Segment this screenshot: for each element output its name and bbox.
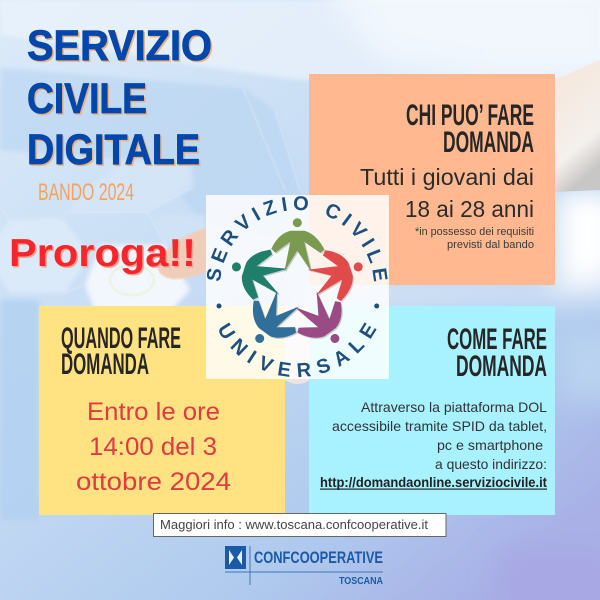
heading: chi puo fare domanda xyxy=(406,99,534,159)
logo: confcooperative toscana xyxy=(225,546,383,587)
heading: chi puo fare domanda: DOMANDA xyxy=(443,126,534,159)
logo text: servizio civile: SERVIZIO CIVILE xyxy=(206,196,388,282)
logo: confcooperative toscana: CONFCOOPERATIVE xyxy=(254,548,383,567)
text: instructions: pc e smartphone xyxy=(437,437,543,453)
logo dots xyxy=(216,304,379,308)
text: eligibility: Tutti i giovani dai xyxy=(360,164,534,190)
heading: come fare domanda xyxy=(447,323,547,383)
panel: chi puo fare domanda xyxy=(309,74,555,285)
text: deadline xyxy=(76,398,231,496)
text: requirements note xyxy=(415,226,534,251)
text: requirements note: previsti dal bando xyxy=(447,239,534,251)
text: instructions: Attraverso la piattaforma DOL xyxy=(361,399,547,415)
heading: quando fare domanda: QUANDO FARE xyxy=(61,322,181,355)
title: SERVIZIO xyxy=(27,22,212,70)
subtitle: bando 2024: BANDO 2024 xyxy=(38,179,134,206)
proroga callout: Proroga!! xyxy=(9,232,196,275)
title: SERVIZIO xyxy=(28,24,214,72)
text: instructions: a questo indirizzo: xyxy=(435,456,547,472)
text: eligibility: 18 ai 28 anni xyxy=(405,196,534,222)
logo text: universale: UNIVERSALE xyxy=(219,322,377,378)
link: application url: http://domandaonline.serviziocivile.it xyxy=(320,474,547,490)
panel: come fare domanda xyxy=(309,306,555,515)
logo: five figures star xyxy=(224,218,371,358)
text: requirements note: *in possesso dei requisiti xyxy=(415,226,534,238)
heading: quando fare domanda xyxy=(61,322,181,381)
text: eligibility xyxy=(360,164,534,222)
title: CIVILE xyxy=(27,75,147,123)
panel: quando fare domanda xyxy=(39,306,285,515)
proroga callout: Proroga!! xyxy=(10,234,198,276)
text: deadline: 14:00 del 3 xyxy=(89,433,217,461)
heading: quando fare domanda: DOMANDA xyxy=(61,348,149,381)
info box: Maggiori info : www.toscana.confcooperative.it xyxy=(160,517,428,532)
text: deadline: ottobre 2024 xyxy=(76,468,231,496)
text: instructions xyxy=(332,399,547,472)
logo: servizio civile universale xyxy=(206,195,389,379)
title: CIVILE xyxy=(28,76,148,124)
info box xyxy=(154,514,446,536)
title: DIGITALE xyxy=(27,126,200,174)
text: deadline: Entro le ore xyxy=(87,398,220,426)
title: DIGITALE xyxy=(28,128,202,176)
logo: confcooperative toscana: TOSCANA xyxy=(339,576,383,587)
title xyxy=(27,22,214,176)
text: instructions: accessibile tramite SPID da tablet, xyxy=(332,418,547,434)
